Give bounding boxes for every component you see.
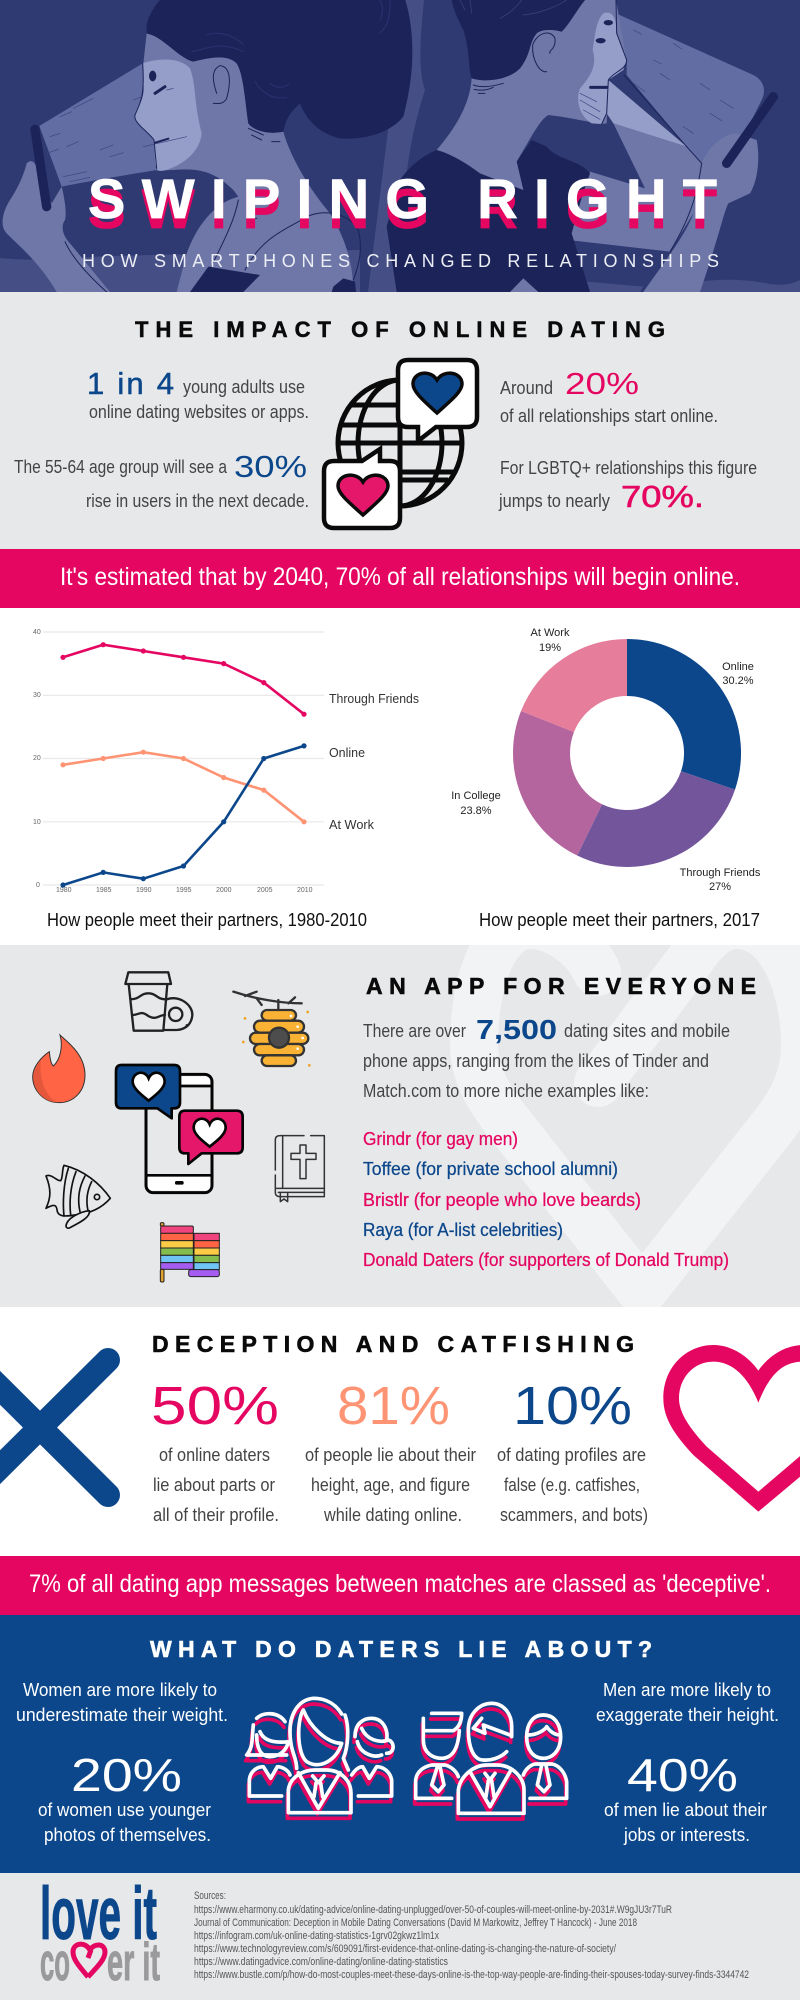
men facts: jobs or interests. — [623, 1825, 750, 1845]
donut chart: Through Friends — [680, 867, 761, 879]
panel: charts — [0, 608, 800, 945]
men facts: 40% — [627, 1749, 738, 1801]
stat: 30% rise — [14, 449, 309, 511]
icon: phone with heart bubbles — [116, 1065, 243, 1193]
stat: 20%: of all relationships start online. — [500, 406, 718, 426]
list of niche apps — [363, 1129, 729, 1270]
list of niche apps: Toffee (for private school alumni) — [363, 1159, 618, 1179]
subtitle: HOW SMARTPHONES CHANGED RELATIONSHIPS — [82, 251, 719, 271]
illustration: couple looking at phones back to back — [0, 0, 800, 292]
hero banner — [0, 0, 800, 292]
stat: 81%: height, age, and figure — [311, 1475, 470, 1495]
line chart: 2000 — [216, 887, 232, 894]
stat: 20%: 20% — [565, 366, 639, 401]
stat: 1 in 4: 1 in 4 — [87, 366, 174, 401]
intro paragraph: Match.com to more niche examples like: — [363, 1081, 649, 1101]
intro paragraph: phone apps, ranging from the likes of Tinder and — [363, 1051, 709, 1071]
series: at work — [60, 750, 307, 824]
line chart: 1980 — [56, 887, 72, 894]
icon: flame — [33, 1035, 85, 1103]
stat: 30% rise: rise in users in the next decade. — [86, 491, 309, 511]
stat: 50%: 50% — [151, 1376, 279, 1436]
stat: 70%: 70%. — [621, 479, 704, 514]
donut chart: 23.8% — [460, 805, 492, 817]
stat: 1 in 4 — [87, 366, 309, 422]
stat: 50%: all of their profile. — [153, 1505, 279, 1525]
banner: 70% by 2040: It's estimated that by 2040, 70% of all relationships will begin online. — [60, 563, 740, 591]
heading: THE IMPACT OF ONLINE DATING — [135, 317, 665, 342]
sources: https://www.technologyreview.com/s/609091/first-evidence-that-online-dating-is-changing-the-nature-of-society/ — [194, 1943, 617, 1955]
icon: bible — [275, 1136, 324, 1202]
list of niche apps: Grindr (for gay men) — [363, 1129, 518, 1149]
stat: 70% — [498, 458, 757, 514]
panel: deception and catfishing — [0, 1336, 800, 1525]
line chart: 1985 — [96, 887, 112, 894]
logo: love it cover it — [40, 1872, 160, 1992]
stat: 10%: scammers, and bots) — [500, 1505, 648, 1525]
stat: 81%: while dating online. — [323, 1505, 462, 1525]
list of niche apps: Raya (for A-list celebrities) — [363, 1220, 563, 1240]
stat: 10%: 10% — [513, 1376, 632, 1436]
series: online — [60, 743, 307, 888]
line chart: 2010 — [297, 887, 313, 894]
logo: love it cover it: co — [40, 1933, 70, 1992]
icon: beehive — [233, 992, 311, 1067]
stat: 20%: Around — [500, 378, 553, 398]
line chart: 40 — [33, 629, 41, 636]
stat: 20% — [500, 366, 718, 426]
icon: groups of women and men — [246, 1698, 567, 1819]
stat: 10% — [497, 1376, 648, 1525]
icon: blue cross — [0, 1358, 108, 1497]
sources: Journal of Communication: Deception in Mobile Dating Conversations (David M Markowitz, Jeffrey T Hancock) - June 2018 — [194, 1917, 637, 1929]
stat: 30% rise: 30% — [234, 449, 307, 484]
donut chart: In College — [451, 790, 501, 802]
stat: 50%: of online daters — [159, 1445, 270, 1465]
intro paragraph: 7,500 — [476, 1014, 557, 1045]
banner: 70% by 2040 — [0, 549, 800, 608]
panel: what do daters lie about — [0, 1615, 800, 1873]
line chart — [33, 629, 419, 894]
stat: 50%: lie about parts or — [153, 1475, 275, 1495]
panel: footer — [0, 1872, 800, 2000]
title: SWIPING RIGHT — [88, 167, 717, 230]
men facts — [596, 1680, 779, 1845]
line chart: Through Friends — [329, 691, 419, 706]
panel: an app for everyone — [0, 925, 800, 1307]
line chart: 20 — [33, 755, 41, 762]
stat: 81% — [305, 1376, 476, 1525]
line chart: 30 — [33, 692, 41, 699]
line chart: 1995 — [176, 887, 192, 894]
logo: love it cover it: love it — [40, 1872, 157, 1955]
stat: 30% rise: The 55-64 age group will see a — [14, 457, 228, 477]
heading: AN APP FOR EVERYONE — [366, 973, 756, 999]
line chart: 2005 — [257, 887, 273, 894]
stat: 10%: false (e.g. catfishes, — [504, 1475, 640, 1495]
sources: Sources: — [194, 1890, 226, 1902]
title: SWIPING RIGHT — [88, 177, 717, 240]
stat: 10%: of dating profiles are — [497, 1445, 646, 1465]
women facts — [16, 1680, 228, 1845]
heading: DECEPTION AND CATFISHING — [152, 1331, 634, 1357]
stat: 81%: 81% — [337, 1376, 450, 1436]
donut chart: 19% — [539, 642, 561, 654]
men facts: Men are more likely to — [603, 1680, 771, 1700]
icon: rainbow flag — [160, 1223, 219, 1282]
list of niche apps: Bristlr (for people who love beards) — [363, 1190, 641, 1210]
men facts: exaggerate their height. — [596, 1705, 779, 1725]
caption: donut chart: How people meet their partners, 2017 — [479, 910, 760, 930]
women facts: Women are more likely to — [23, 1680, 217, 1700]
icon: coffee cup — [125, 972, 192, 1031]
line chart: 0 — [36, 882, 40, 889]
icon: fish — [46, 1165, 110, 1228]
donut chart: 27% — [709, 881, 731, 893]
women facts: photos of themselves. — [44, 1825, 211, 1845]
banner: deceptive messages — [0, 1556, 800, 1615]
donut chart: Online — [722, 661, 754, 673]
stat: 1 in 4: young adults use — [183, 377, 305, 397]
series: through friends — [60, 642, 307, 717]
stat: 70%: For LGBTQ+ relationships this figure — [500, 458, 757, 478]
sources: https://www.datingadvice.com/online-dating/online-dating-statistics — [194, 1956, 448, 1968]
line chart: At Work — [329, 817, 374, 832]
line chart: 10 — [33, 819, 41, 826]
stat: 70%: jumps to nearly — [498, 491, 610, 511]
intro paragraph: dating sites and mobile — [564, 1021, 730, 1041]
list of niche apps: Donald Daters (for supporters of Donald Trump) — [363, 1250, 729, 1270]
stat: 50% — [151, 1376, 279, 1525]
sources — [194, 1890, 749, 1981]
heading: WHAT DO DATERS LIE ABOUT? — [150, 1636, 652, 1662]
intro paragraph: There are over — [363, 1021, 466, 1041]
sources: https://infogram.com/uk-online-dating-statistics-1grv02gkwz1lm1x — [194, 1930, 439, 1942]
stat: 1 in 4: online dating websites or apps. — [89, 402, 309, 422]
donut chart: At Work — [531, 627, 570, 639]
stat: 81%: of people lie about their — [305, 1445, 476, 1465]
donut chart: 30.2% — [722, 675, 754, 687]
icons cluster — [33, 972, 324, 1282]
men facts: of men lie about their — [604, 1800, 767, 1820]
panel: the impact of online dating — [0, 292, 800, 550]
donut chart — [451, 627, 761, 893]
line chart: Online — [329, 745, 365, 760]
logo: love it cover it: er it — [107, 1933, 160, 1992]
women facts: underestimate their weight. — [16, 1705, 228, 1725]
caption: line chart: How people meet their partners, 1980-2010 — [47, 910, 367, 930]
women facts: of women use younger — [38, 1800, 211, 1820]
icon: pink heart outline — [663, 1345, 800, 1512]
intro paragraph — [363, 1014, 730, 1101]
icon: globe with heart speech bubbles — [324, 360, 477, 528]
women facts: 20% — [71, 1749, 182, 1801]
line chart: 1990 — [136, 887, 152, 894]
